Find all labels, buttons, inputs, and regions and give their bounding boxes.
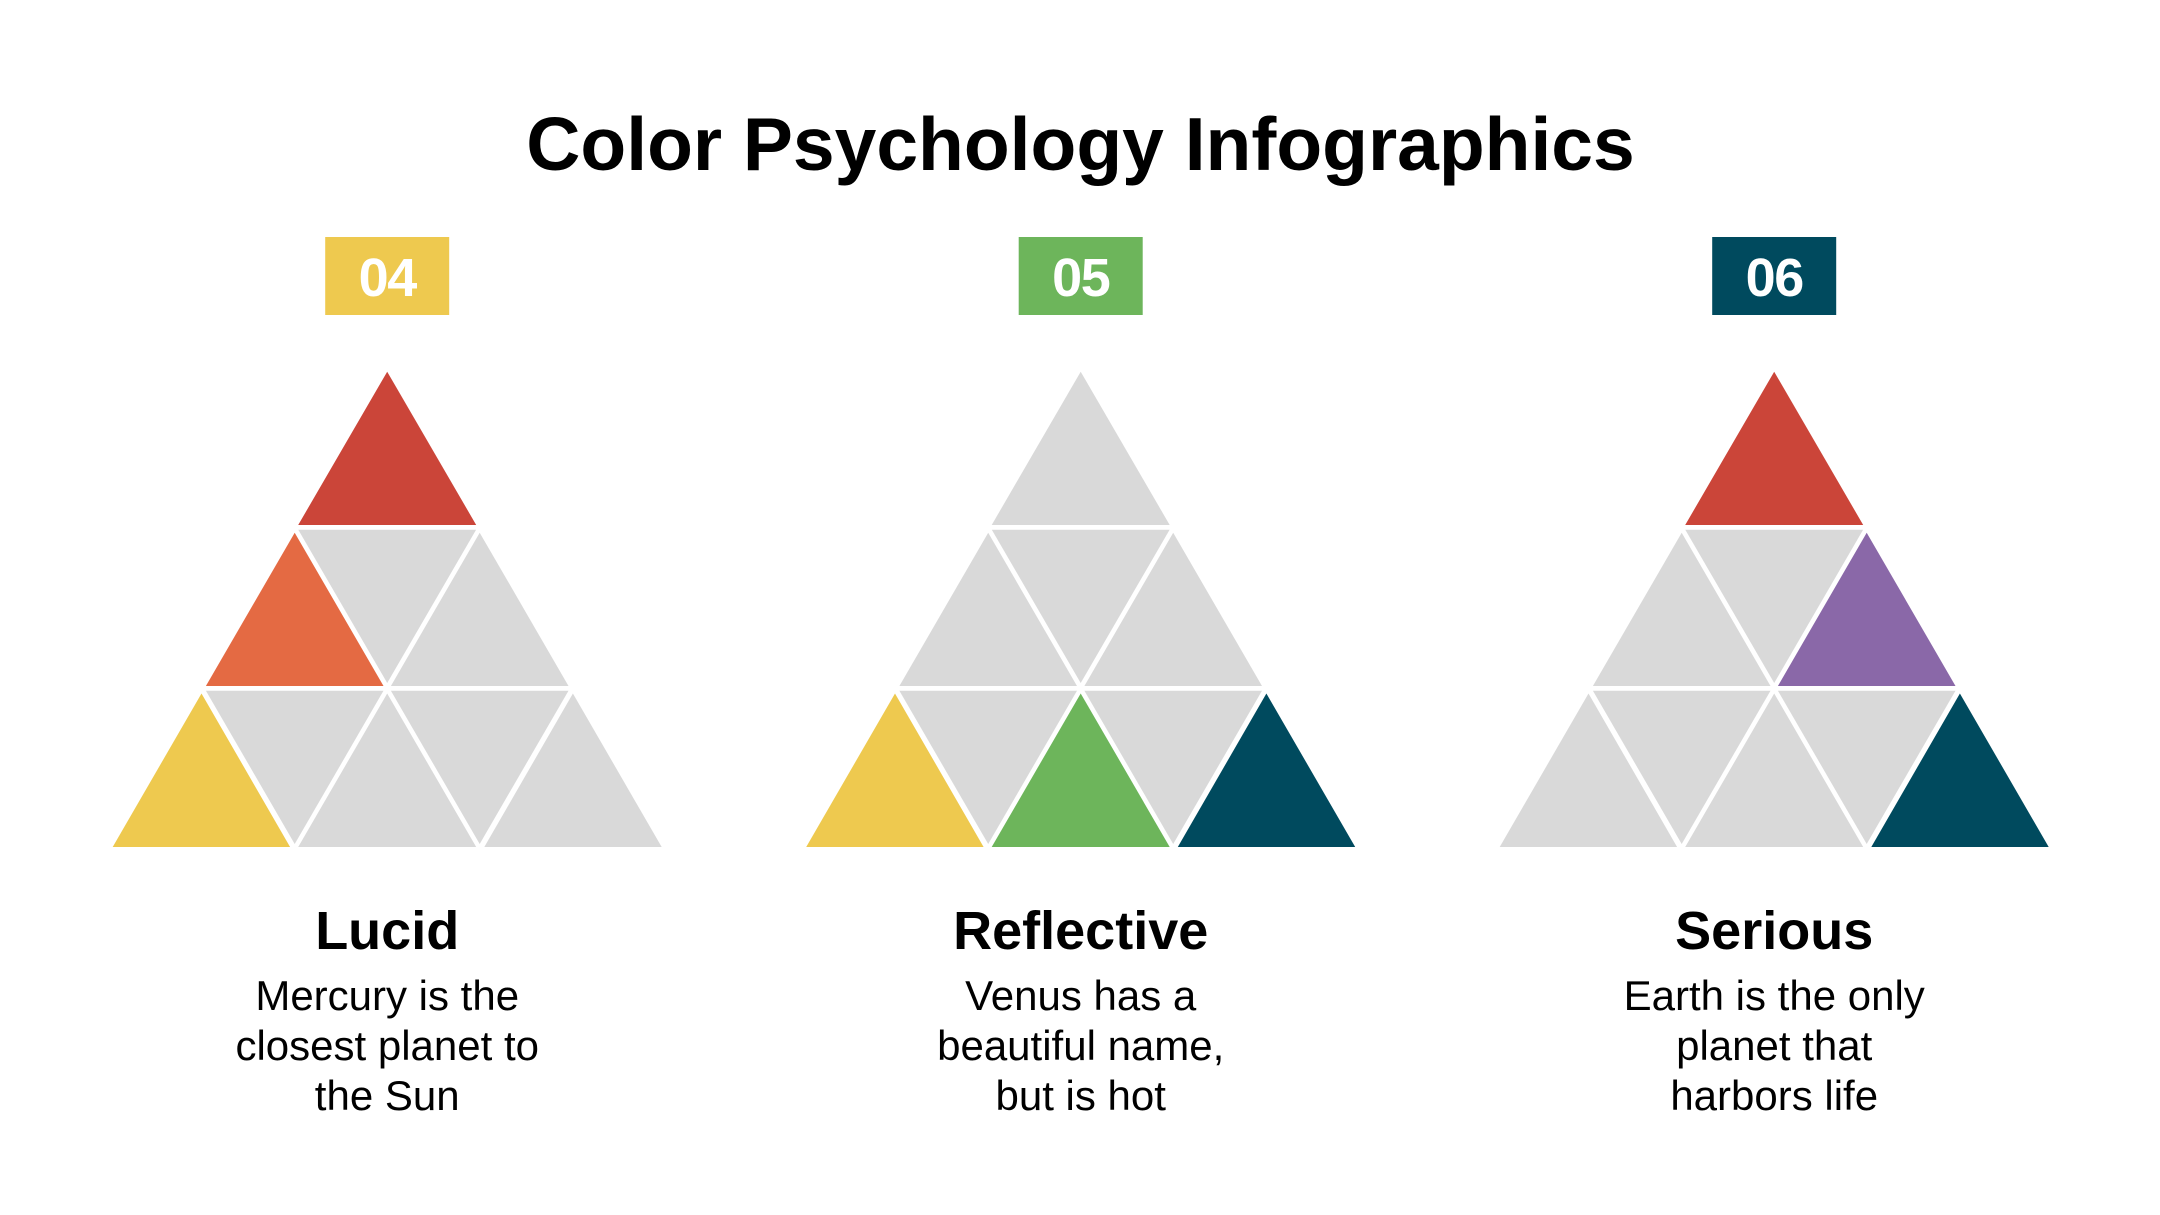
- text: Serious description: harbors life: [1670, 1072, 1878, 1119]
- heading: Serious: Serious: [1675, 901, 1873, 961]
- text: Serious description: Earth is the only: [1624, 972, 1925, 1019]
- text: Lucid description: the Sun: [315, 1072, 460, 1119]
- text: Reflective description: beautiful name,: [937, 1022, 1224, 1069]
- badge: 04: 04: [359, 248, 417, 308]
- triangle pyramid: 05: [806, 372, 1355, 847]
- panel: 05 Reflective: [806, 237, 1355, 1119]
- text: Reflective description: Venus has a: [965, 972, 1197, 1019]
- panel: 04 Lucid: [113, 237, 662, 1119]
- text: Lucid description: closest planet to: [235, 1022, 539, 1069]
- badge: 04: [325, 237, 449, 315]
- heading: Lucid: Lucid: [315, 901, 459, 961]
- text: Lucid description: Mercury is the: [255, 972, 519, 1019]
- text: Serious description: planet that: [1676, 1022, 1873, 1069]
- badge: 05: [1019, 237, 1143, 315]
- badge: 05: 05: [1052, 248, 1110, 308]
- heading: Reflective: Reflective: [953, 901, 1208, 961]
- title: Color Psychology Infographics: [526, 102, 1635, 186]
- badge: 06: [1712, 237, 1836, 315]
- panel: 06 Serious: [1500, 237, 2049, 1119]
- text: Reflective description: but is hot: [995, 1072, 1166, 1119]
- badge: 06: 06: [1746, 248, 1803, 308]
- triangle pyramid: 04: [113, 372, 662, 847]
- triangle pyramid: 06: [1500, 372, 2049, 847]
